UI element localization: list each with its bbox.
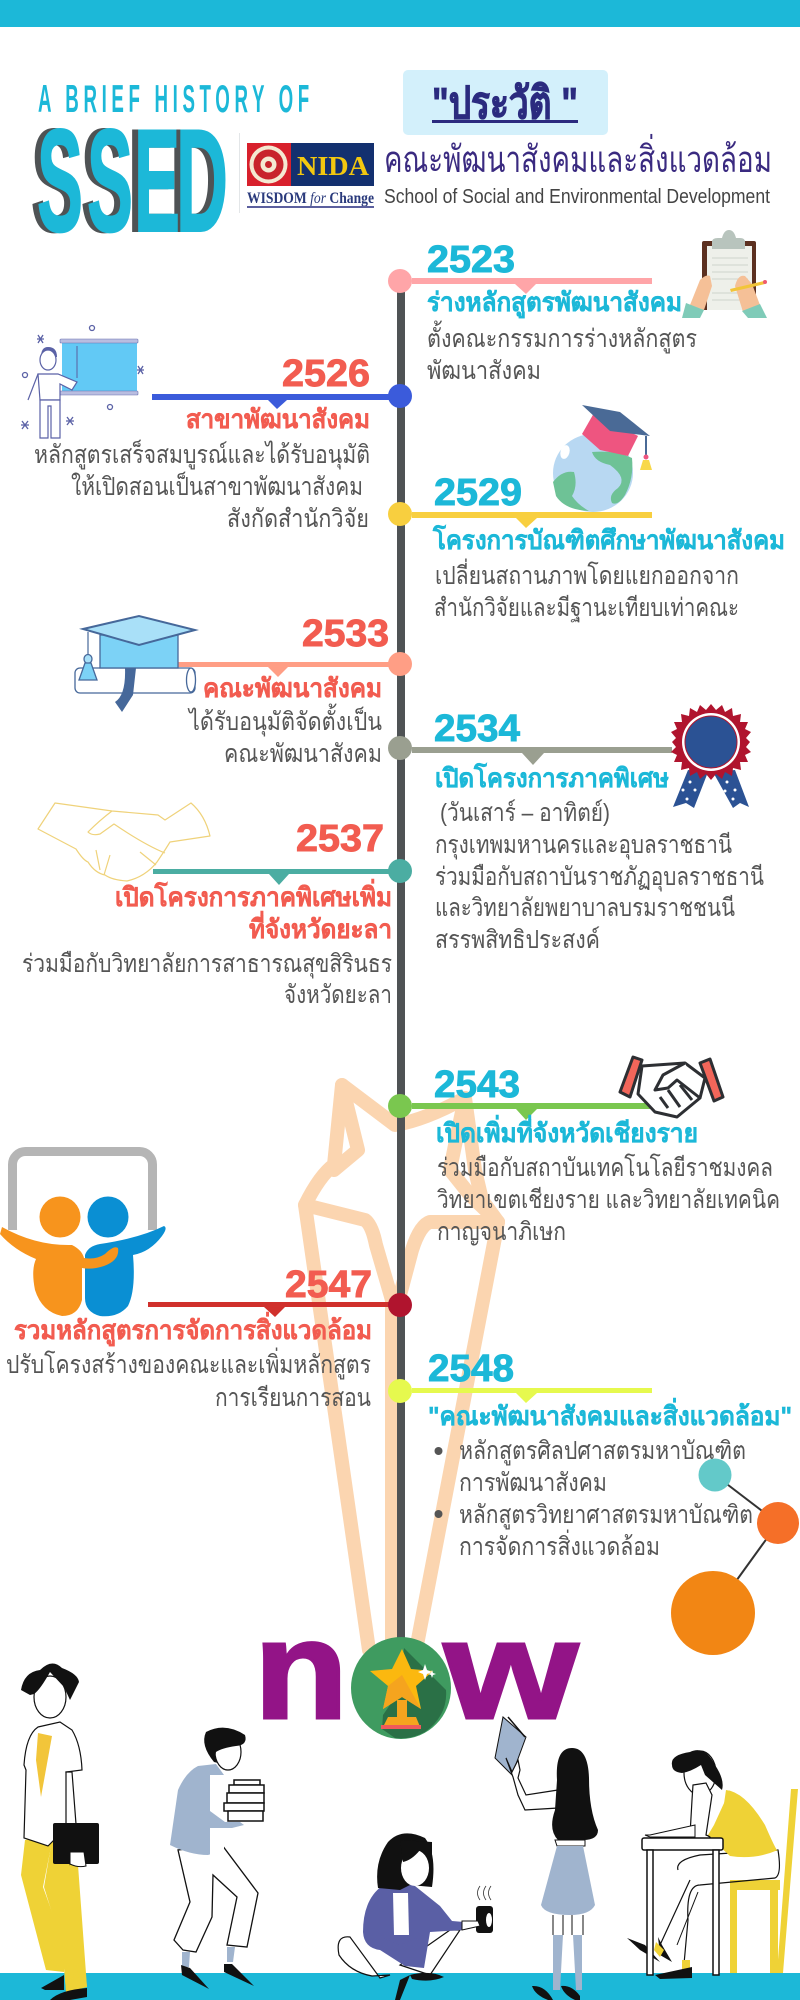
year 2537: 2537 <box>296 818 384 860</box>
node 2548 <box>388 1379 412 1403</box>
description 2537 <box>22 950 392 1009</box>
description 2534: และวิทยาลัยพยาบาลบรมราชชนนี <box>435 894 735 922</box>
node 2533 <box>388 652 412 676</box>
year 2548: 2548 <box>428 1348 514 1390</box>
icon: graduation cap and diploma <box>75 616 196 712</box>
description 2526 <box>34 439 370 533</box>
heading 2543: เปิดเพิ่มที่จังหวัดเชียงราย <box>436 1114 698 1148</box>
milestone 2547 <box>6 1264 412 1412</box>
year 2547: 2547 <box>285 1264 372 1306</box>
node 2534 <box>388 736 412 760</box>
icon: clipboard with hands <box>682 230 767 318</box>
description 2529: สำนักวิจัยและมีฐานะเทียบเท่าคณะ <box>434 594 739 622</box>
now wordmark with trophy: w <box>443 1591 579 1748</box>
heading 2537 <box>115 878 392 944</box>
connector 2543 <box>412 1103 650 1120</box>
bottom floor band <box>0 1973 800 2000</box>
header: SSED wordmark: E <box>134 99 180 262</box>
bullet list 2548: การพัฒนาสังคม <box>459 1469 607 1497</box>
icon: teacher at board <box>21 326 144 438</box>
heading 2537: เปิดโครงการภาคพิเศษเพิ่ม <box>115 878 392 912</box>
title box: history <box>403 70 608 135</box>
description 2533: คณะพัฒนาสังคม <box>224 740 382 768</box>
header: SSED wordmark: E <box>128 99 174 262</box>
milestone 2548 <box>388 1348 792 1561</box>
year 2523: 2523 <box>427 239 515 281</box>
description 2547 <box>6 1347 371 1412</box>
now wordmark with trophy <box>254 1591 579 1748</box>
NIDA logo: WISDOM for Change <box>247 190 374 207</box>
header: SSED wordmark: S <box>87 99 133 262</box>
icon: globe with graduation cap <box>553 405 652 512</box>
description 2547: ปรับโครงสร้างของคณะและเพิ่มหลักสูตร <box>6 1347 371 1380</box>
connector 2529 <box>412 512 652 528</box>
icon: rosette medal <box>671 704 751 808</box>
NIDA logo <box>247 143 374 208</box>
description 2526: หลักสูตรเสร็จสมบูรณ์และได้รับอนุมัติ <box>34 439 370 470</box>
header: SSED wordmark: D <box>170 99 222 262</box>
header: SSED wordmark <box>31 99 228 262</box>
year 2543: 2543 <box>434 1064 520 1106</box>
text: D <box>176 99 228 262</box>
year 2526: 2526 <box>282 353 370 395</box>
description 2537: ร่วมมือกับวิทยาลัยการสาธารณสุขสิรินธร <box>22 950 392 979</box>
heading 2533: คณะพัฒนาสังคม <box>203 673 382 703</box>
description 2523 <box>427 320 697 385</box>
icon: handshake with red cuffs <box>620 1057 723 1117</box>
heading 2547: รวมหลักสูตรการจัดการสิ่งแวดล้อม <box>14 1311 372 1347</box>
network circles <box>671 1458 799 1655</box>
top band <box>0 0 800 27</box>
heading 2523: ร่างหลักสูตรพัฒนาสังคม <box>427 287 682 319</box>
year 2529: 2529 <box>434 472 522 514</box>
node 2537 <box>388 859 412 883</box>
description 2534: สรรพสิทธิประสงค์ <box>435 926 600 954</box>
node 2529 <box>388 502 412 526</box>
milestone 2529 <box>388 472 785 622</box>
header: SSED wordmark: S <box>81 99 127 262</box>
connector 2523 <box>412 278 652 294</box>
heading 2526: สาขาพัฒนาสังคม <box>186 404 370 434</box>
description 2543: กาญจนาภิเษก <box>437 1218 566 1246</box>
bullet list 2548 <box>434 1437 753 1561</box>
description 2543 <box>437 1153 780 1246</box>
bullet list 2548: การจัดการสิ่งแวดล้อม <box>459 1529 660 1561</box>
description 2547: การเรียนการสอน <box>215 1384 371 1412</box>
now wordmark with trophy: n <box>254 1591 348 1748</box>
icon: outlined handshake <box>38 803 210 881</box>
illustration: woman reading with raised book <box>495 1717 598 2000</box>
description 2526: สังกัดสำนักวิจัย <box>227 505 369 533</box>
description 2534 <box>435 799 764 954</box>
node 2526 <box>388 384 412 408</box>
milestone 2537 <box>22 818 412 1009</box>
milestone 2533 <box>178 613 412 768</box>
illustration: man carrying books <box>170 1728 264 1989</box>
header: A brief history of: A BRIEF HISTORY OF <box>38 78 309 121</box>
node 2543 <box>388 1094 412 1118</box>
NIDA logo: NIDA <box>297 151 370 181</box>
header: SSED wordmark: S <box>31 99 77 262</box>
illustration: seated woman with coffee <box>338 1833 493 2000</box>
illustration: man seated at table with yellow chair <box>627 1750 798 1979</box>
illustration: standing man with folder <box>21 1663 99 2000</box>
description 2523: พัฒนาสังคม <box>427 357 541 385</box>
milestone 2526 <box>34 353 412 533</box>
heading 2534: เปิดโครงการภาคพิเศษ <box>435 762 669 793</box>
milestone 2534 <box>388 708 764 954</box>
description 2534: กรุงเทพมหานครและอุบลราชธานี <box>435 831 732 860</box>
connector 2537 <box>153 869 390 885</box>
year 2534: 2534 <box>434 708 520 750</box>
description 2533: ได้รับอนุมัติจัดตั้งเป็น <box>187 703 382 737</box>
description 2526: ให้เปิดสอนเป็นสาขาพัฒนาสังคม <box>71 471 363 501</box>
bullet list 2548: หลักสูตรวิทยาศาสตรมหาบัณฑิต <box>459 1501 753 1530</box>
description 2537: จังหวัดยะลา <box>284 981 392 1009</box>
node 2547 <box>388 1293 412 1317</box>
description 2529 <box>434 558 739 622</box>
icon: people holding board logo <box>0 1152 170 1316</box>
icon: star trophy badge <box>351 1637 451 1739</box>
milestone 2523 <box>388 239 697 385</box>
description 2533 <box>187 703 382 768</box>
description 2534: (วันเสาร์ – อาทิตย์) <box>440 799 610 827</box>
description 2523: ตั้งคณะกรรมการร่างหลักสูตร <box>427 320 697 354</box>
bullet list 2548: หลักสูตรศิลปศาสตรมหาบัณฑิต <box>459 1437 746 1466</box>
header: SSED wordmark: S <box>37 99 83 262</box>
timeline trunk <box>397 285 405 1645</box>
connector 2548 <box>412 1388 652 1403</box>
heading 2537: ที่จังหวัดยะลา <box>249 910 392 944</box>
node 2523 <box>388 269 412 293</box>
milestone 2543 <box>388 1064 780 1246</box>
title box: history: "ประวัติ " <box>432 79 578 128</box>
year 2533: 2533 <box>302 613 389 655</box>
connector 2533 <box>178 662 390 677</box>
description 2529: เปลี่ยนสถานภาพโดยแยกออกจาก <box>435 558 739 590</box>
connector 2526 <box>152 394 390 409</box>
connector 2534 <box>412 747 672 765</box>
connector 2547 <box>148 1302 390 1317</box>
decorative trophy outline <box>305 1085 498 1660</box>
